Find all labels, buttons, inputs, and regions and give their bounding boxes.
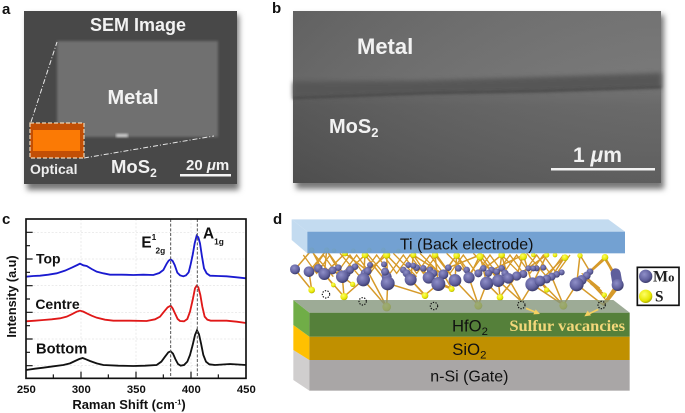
x tick labels: 350 [127,384,146,396]
label: Metal: Metal [107,87,159,109]
legend: Mo and S atoms: Mo [653,269,674,286]
layer: n-Si gate: n-Si (Gate) [430,369,508,386]
rod: stacked atoms at right edge [616,273,618,285]
y axis title: Intensity (a.u) [5,255,19,338]
label: MoS2: 2 [371,125,378,140]
layer: SiO2: SiO [452,340,480,359]
Ti back electrode: Ti (Back electrode) [400,236,533,253]
series label: Top: Top [36,250,61,266]
x tick labels [17,384,256,396]
layer: HfO2: HfO [452,317,482,336]
molybdenum atoms [290,261,624,291]
panel c: Raman spectra chart [5,219,256,412]
panel letter d: d [273,211,282,228]
layer: HfO2 [293,300,630,338]
scale bar: 1 um: 1 μm [573,144,622,167]
peak label: E2g: 2g [156,245,165,255]
label: Sulfur vacancies: Sulfur vacancies [509,318,625,335]
peak label: E2g: 1 [152,232,157,242]
curve: Centre (red) [26,286,246,323]
MoS2 lattice [290,247,624,311]
curve: Top (blue) [26,236,246,278]
HfO2 top face [293,300,630,313]
layer: n-Si gate [293,350,630,391]
legend: Mo and S atoms: S [655,289,664,306]
x tick labels: 250 [17,384,36,396]
zoom guide lines [31,42,214,158]
peak markers [171,219,197,378]
label: Optical: Optical [30,161,77,177]
sulfur vacancies markers [322,291,605,310]
panel letter b: b [272,0,281,17]
series label: Bottom: Bottom [36,342,87,358]
panel letter a: a [2,1,11,18]
scale bar: 1 um [551,144,655,170]
layer: HfO2: 2 [482,326,488,338]
label: Metal: Metal [357,34,413,59]
x axis title: ) [181,397,186,412]
x axis title: -1 [175,397,181,406]
legend: Mo and S atoms [637,267,679,306]
scale bar: 20 um: 20 μm [186,157,229,174]
label: MoS2: 2 [150,166,157,180]
curve: Bottom (black) [26,330,246,370]
panel a: SEM image with optical inset [24,11,239,190]
series label: Centre: Centre [35,296,80,312]
heading: SEM Image: SEM Image [90,15,186,35]
arrows to vacancies [526,308,598,316]
peak label: A1g: 1g [214,237,224,247]
layer: SiO2: 2 [480,349,486,361]
label: MoS2: MoS [329,116,371,138]
x tick labels: 400 [182,384,201,396]
peak label: A1g: A [203,226,214,243]
panel d: device schematic [290,219,679,391]
panel b: SEM close-up [293,11,664,189]
x tick labels: 300 [72,384,91,396]
panel letter c: c [2,211,10,228]
label: MoS2: MoS [111,156,150,177]
Ti back electrode [292,219,625,253]
peak label: E2g: E [141,234,152,251]
x tick labels: 450 [237,384,256,396]
layer: SiO2 [293,325,630,361]
optical inset [30,123,84,158]
x axis title: Raman Shift (cm [72,397,175,412]
sulfur atoms [308,247,608,311]
axes frame [26,219,246,378]
